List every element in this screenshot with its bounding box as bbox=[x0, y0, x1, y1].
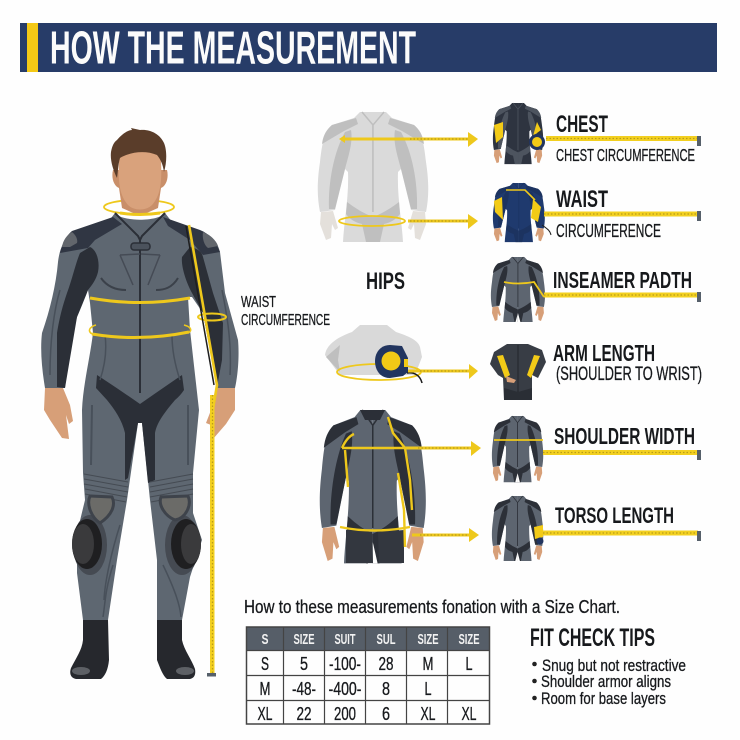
size chart table: L bbox=[466, 654, 472, 674]
title banner: HOW THE MEASUREMENT bbox=[50, 22, 416, 74]
size chart table: S bbox=[261, 654, 269, 674]
icon: torso length mini figure bbox=[492, 496, 544, 561]
size chart table: 5 bbox=[300, 654, 308, 674]
dark figure with measurement lines bbox=[320, 410, 426, 563]
size chart table: 22 bbox=[296, 704, 312, 724]
arrow: waist bbox=[408, 214, 478, 229]
measurement loops on figure bbox=[89, 213, 226, 338]
fit check tips: Shoulder armor aligns bbox=[541, 672, 671, 691]
arrow: chest bbox=[339, 132, 478, 147]
size chart table: -100- bbox=[329, 654, 361, 674]
size chart table: M bbox=[422, 654, 434, 674]
fit check tips: FIT CHECK TIPS bbox=[530, 624, 655, 652]
label: waist circumference: CIRCUMFERENCE bbox=[241, 312, 330, 329]
size chart intro text: How to these measurements fonation with a Size Chart. bbox=[244, 597, 620, 617]
icon: chest mini figure bbox=[493, 103, 545, 164]
row: arm length bbox=[490, 340, 702, 400]
row: torso length bbox=[492, 496, 701, 561]
icon: arm length mini figure bbox=[490, 344, 546, 400]
suit dark panels bbox=[57, 217, 223, 483]
size chart table: SIZE bbox=[294, 631, 314, 648]
size chart table: -48- bbox=[292, 679, 316, 699]
size chart table: 28 bbox=[378, 654, 394, 674]
row: waist: CIRCUMFERENCE bbox=[556, 221, 661, 241]
icon: inseam mini figure bbox=[491, 257, 545, 322]
size chart table bbox=[246, 627, 490, 724]
size chart table: S bbox=[262, 631, 268, 648]
fit check tips bbox=[530, 624, 686, 708]
size chart table: 200 bbox=[334, 704, 356, 724]
size chart table: -400- bbox=[328, 679, 362, 699]
neck measuring loop bbox=[104, 200, 174, 214]
row: torso length: TORSO LENGTH bbox=[555, 503, 674, 528]
suit silhouette bbox=[41, 213, 239, 620]
size chart table: XL bbox=[462, 704, 476, 724]
row: chest bbox=[493, 103, 701, 165]
row: waist: WAIST bbox=[556, 186, 608, 213]
icon: shoulder width mini figure bbox=[492, 416, 543, 482]
arrow: hips bbox=[408, 364, 478, 379]
boots bbox=[70, 620, 195, 679]
row: chest: CHEST bbox=[556, 111, 608, 138]
left knee armour bbox=[72, 496, 114, 575]
icon: waist mini figure bbox=[493, 183, 551, 242]
size chart table: SIZE bbox=[418, 631, 438, 648]
fit check tips: Room for base layers bbox=[541, 689, 666, 708]
ghost figure: chest and waist bbox=[318, 112, 428, 242]
label: waist circumference bbox=[241, 294, 330, 329]
ghost torso with hip loop bbox=[325, 325, 422, 380]
main figure: rider in race suit bbox=[41, 128, 239, 679]
size chart table: 8 bbox=[382, 679, 390, 699]
size chart table: SUL bbox=[376, 631, 396, 648]
leg rib panels bbox=[84, 474, 193, 502]
icon: tape measure bbox=[375, 345, 422, 383]
size chart table: L bbox=[424, 679, 432, 699]
row: waist bbox=[493, 183, 701, 242]
row: arm length: ARM LENGTH bbox=[553, 340, 655, 366]
size chart table: XL bbox=[420, 704, 436, 724]
fit check tips: Snug but not restractive bbox=[542, 656, 686, 675]
label: waist circumference: WAIST bbox=[241, 294, 276, 311]
vertical measuring tape bbox=[186, 225, 217, 676]
right knee armour bbox=[160, 496, 201, 575]
row: inseam bbox=[491, 257, 701, 322]
zip, collar and chest seams bbox=[50, 213, 230, 617]
heading: hips: HIPS bbox=[366, 268, 405, 295]
size chart table: M bbox=[260, 679, 270, 699]
size chart table: SIZE bbox=[458, 631, 480, 648]
arrow: dark figure upper bbox=[405, 441, 481, 456]
size chart table: SUIT bbox=[334, 631, 356, 648]
icon: head bbox=[111, 128, 168, 216]
row: shoulder width bbox=[492, 416, 701, 482]
shoulder pads bbox=[62, 232, 218, 248]
size chart table: 6 bbox=[382, 704, 390, 724]
arrow: dark figure lower bbox=[412, 528, 479, 542]
size chart table: XL bbox=[258, 704, 272, 724]
hands bbox=[44, 388, 235, 439]
